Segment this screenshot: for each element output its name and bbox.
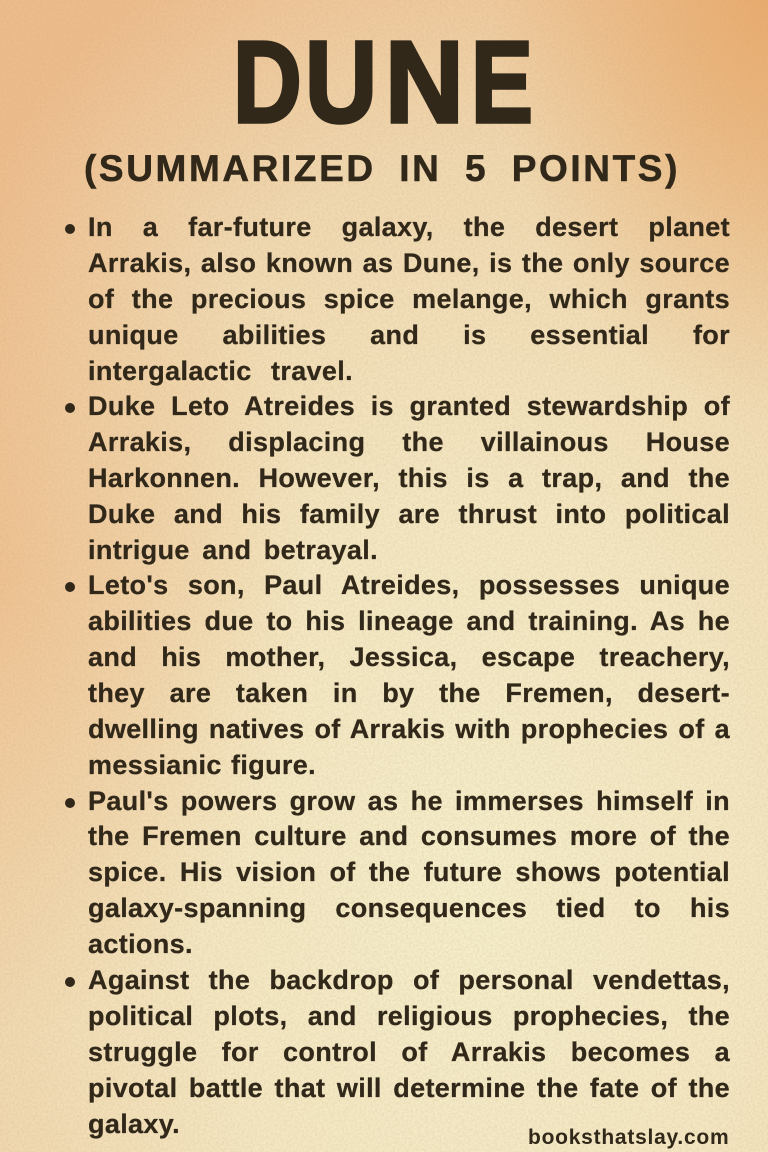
point 4: the Fremen culture and consumes more of the <box>88 821 730 851</box>
point 5: Against the backdrop of personal vendettas, <box>88 965 730 995</box>
subtitle: (SUMMARIZED IN 5 POINTS) <box>84 148 680 189</box>
point 4: galaxy-spanning consequences tied to his <box>88 893 730 923</box>
point 1: unique abilities and is essential for <box>88 320 730 350</box>
point 3: abilities due to his lineage and training. As he <box>88 606 730 636</box>
point 3: Leto's son, Paul Atreides, possesses unique <box>88 570 730 600</box>
point 5: political plots, and religious prophecies, the <box>88 1001 730 1031</box>
point 5: struggle for control of Arrakis becomes a <box>88 1037 730 1067</box>
website credit: booksthatslay.com <box>528 1126 729 1149</box>
point 4: spice. His vision of the future shows potential <box>88 857 730 887</box>
point 4: actions. <box>88 929 193 959</box>
point 4: Paul's powers grow as he immerses himself in <box>88 786 730 816</box>
point 1: of the precious spice melange, which grants <box>88 284 730 314</box>
point 2: Duke and his family are thrust into political <box>88 499 730 529</box>
point 5: galaxy. <box>88 1109 180 1139</box>
point 1: Arrakis, also known as Dune, is the only source <box>88 248 730 278</box>
point 3: messianic figure. <box>88 750 316 780</box>
point 5: pivotal battle that will determine the fate of the <box>88 1073 730 1103</box>
point 1: intergalactic travel. <box>88 356 353 386</box>
point 1: In a far-future galaxy, the desert planet <box>88 212 730 242</box>
point 3: they are taken in by the Fremen, desert- <box>88 678 730 708</box>
point 2: Arrakis, displacing the villainous House <box>88 427 730 457</box>
point 3: and his mother, Jessica, escape treachery, <box>88 642 730 672</box>
title <box>233 20 533 136</box>
point 2: Duke Leto Atreides is granted stewardship of <box>88 391 730 421</box>
point 3: dwelling natives of Arrakis with prophecies of a <box>88 714 730 744</box>
point 2: Harkonnen. However, this is a trap, and the <box>88 463 730 493</box>
point 2: intrigue and betrayal. <box>88 535 378 565</box>
